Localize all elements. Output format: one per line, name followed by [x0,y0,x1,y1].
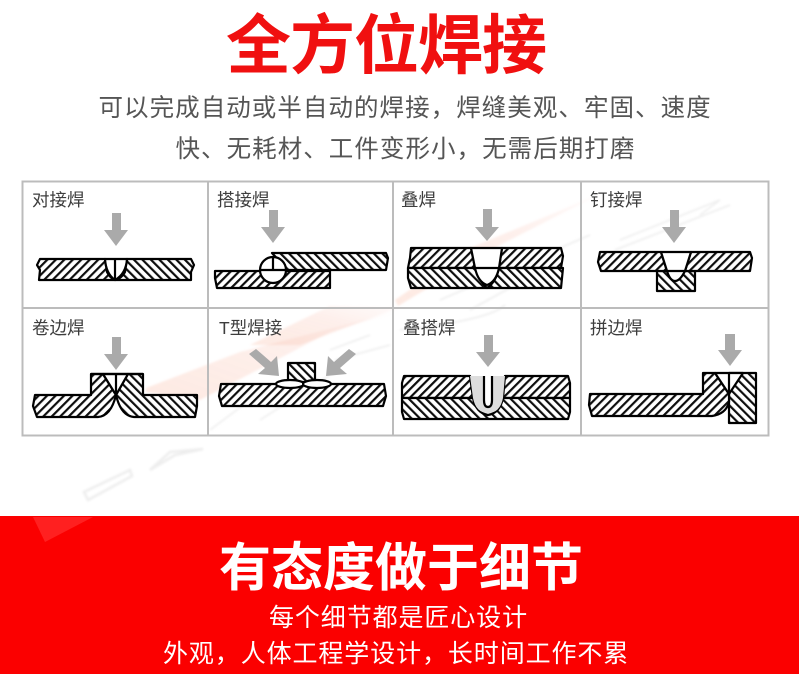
red banner [0,516,799,674]
banner text block: 外观，人体工程学设计，长时间工作不累 [163,640,629,668]
panel: T型焊接 [219,318,386,406]
panel: 拼边焊: 拼边焊 [590,318,642,338]
panel: 拼边焊 [589,318,756,423]
panel: 搭接焊: 搭接焊 [217,190,270,210]
banner heading: 有态度做于细节 [219,540,583,598]
panel: 叠搭焊: 叠搭焊 [403,318,456,338]
subtitle text block: 快、无耗材、工件变形小，无需后期打磨 [176,135,635,163]
panel: 对接焊 [32,190,194,280]
subtitle text block [98,94,712,163]
banner corner highlight [33,517,93,542]
watermark swoosh [84,194,730,500]
panel: 卷边焊 [32,318,197,417]
panel: 叠焊 [401,190,563,288]
panel: 对接焊: 对接焊 [32,190,84,210]
panel: 搭接焊 [215,190,388,288]
panel: 卷边焊: 卷边焊 [32,318,84,338]
banner text block [163,604,629,668]
panel: 叠焊: 叠焊 [401,190,436,210]
panel: 钉接焊: 钉接焊 [590,190,642,210]
banner text block: 每个细节都是匠心设计 [269,604,528,632]
panel: 钉接焊 [590,190,752,291]
subtitle text block: 可以完成自动或半自动的焊接，焊缝美观、牢固、速度 [98,94,712,122]
panel: 叠搭焊 [402,318,570,419]
panel: T型焊接: T型焊接 [219,318,282,338]
welding types grid [22,181,769,436]
title: 全方位焊接 [226,9,546,82]
